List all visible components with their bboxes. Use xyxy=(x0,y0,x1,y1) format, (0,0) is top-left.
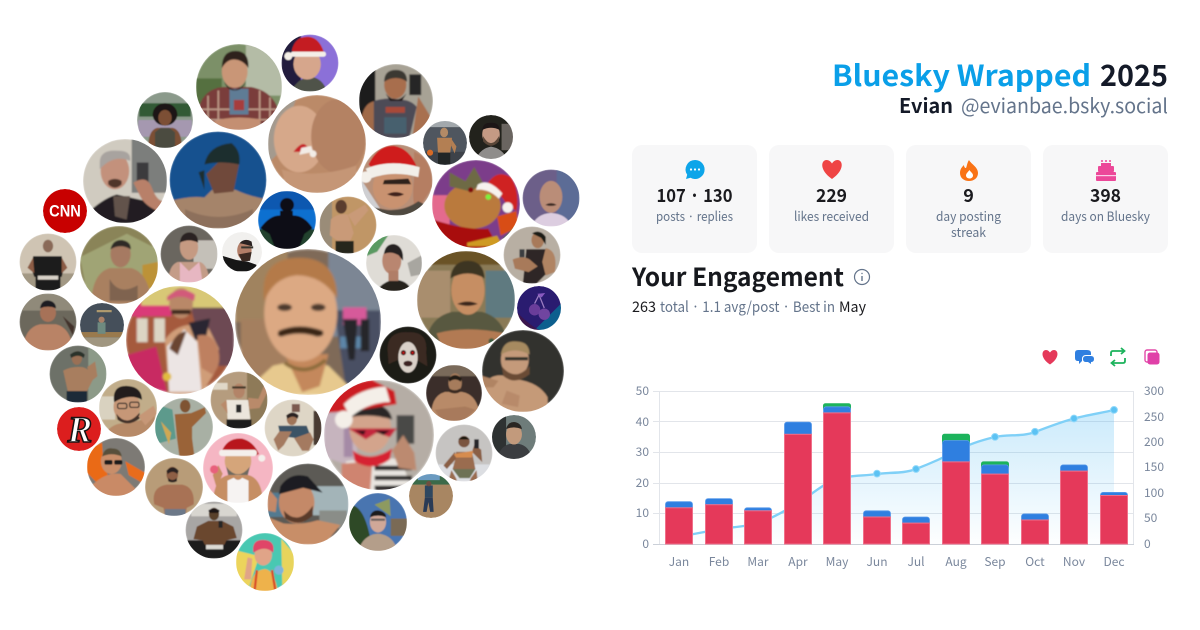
icon: replies bubbles xyxy=(1075,350,1094,364)
avatar: gym mirror man xyxy=(423,121,467,165)
avatar: santa hat man with red glasses xyxy=(324,380,434,490)
avatar: shirtless man olive wall xyxy=(80,226,158,304)
stat card: day posting streak: 9 xyxy=(963,182,974,208)
right axis labels: 300 xyxy=(1144,382,1164,399)
avatar: santa hat man purple background xyxy=(282,34,338,92)
month labels: Aug xyxy=(945,553,967,570)
engagement summary: 263 xyxy=(632,296,656,317)
left axis labels: 40 xyxy=(636,413,649,430)
avatar: man in black tank mirror xyxy=(20,234,76,290)
avatar: plaid shirt man xyxy=(196,44,282,130)
icon: info xyxy=(854,270,870,284)
chart: monthly engagement xyxy=(636,382,1164,570)
avatar: cartoon man with santa hat pink background xyxy=(203,433,273,503)
title: 2025 xyxy=(1100,53,1168,95)
avatar: CNN logo xyxy=(43,189,87,233)
right axis labels: 0 xyxy=(1144,535,1151,552)
avatar: smiling man in dark tee xyxy=(492,415,536,459)
avatar: R logo: R xyxy=(67,409,92,450)
cumulative points xyxy=(874,406,1117,477)
avatar: man in white tank pink scene xyxy=(126,286,234,394)
icon: reposts arrows xyxy=(1111,348,1125,366)
avatar: muscular man brick wall xyxy=(145,458,203,516)
avatar: colorful cartoon man xyxy=(236,533,294,591)
right axis labels: 100 xyxy=(1144,484,1164,501)
avatar: bearded man dark wall xyxy=(482,330,564,412)
stat card: days on Bluesky: days on Bluesky xyxy=(1061,206,1150,225)
month labels: Feb xyxy=(709,553,729,570)
stat card: likes received xyxy=(769,145,894,253)
left axis labels: 20 xyxy=(636,474,649,491)
avatar: bearded man dark background xyxy=(469,115,513,159)
avatar: R logo xyxy=(57,407,101,451)
avatar cluster xyxy=(20,34,580,591)
right axis labels: 150 xyxy=(1144,458,1164,475)
avatar: dark gym selfie man xyxy=(186,502,242,558)
month labels: Mar xyxy=(747,553,769,570)
cumulative area xyxy=(679,410,1114,544)
avatar: shirtless man dark background xyxy=(20,294,76,350)
grid lines xyxy=(653,391,1134,544)
stat card: posts and replies: posts · replies xyxy=(656,206,733,225)
month labels: Jan xyxy=(669,553,689,570)
avatar: blue sky silhouette xyxy=(258,191,316,249)
stat card: posts and replies: 107 · 130 xyxy=(656,182,732,208)
stat card: likes received: 229 xyxy=(816,182,847,208)
engagement summary: total · 1.1 avg/post · Best in xyxy=(660,296,835,317)
avatar: man seated before dark wall xyxy=(80,303,124,347)
blue bars xyxy=(666,407,1128,527)
icon: flame xyxy=(960,160,978,181)
avatar: grey band tee selfie man xyxy=(359,64,433,138)
stat card: posts and replies xyxy=(632,145,757,253)
month labels: Apr xyxy=(788,553,808,570)
avatar: man outdoors in sunshine xyxy=(349,493,407,551)
left axis labels: 0 xyxy=(642,535,649,552)
avatar: man in underwear selfie xyxy=(436,424,492,482)
left axis labels: 10 xyxy=(636,504,649,521)
right axis labels: 200 xyxy=(1144,433,1164,450)
avatar: smiling man in olive tee xyxy=(417,251,515,349)
stat card: day posting streak: day posting xyxy=(936,206,1002,225)
avatar: crouching man white room xyxy=(264,400,322,456)
avatar: man with glasses reclining xyxy=(99,379,157,437)
left axis labels xyxy=(636,382,649,552)
avatar: man in pink tank xyxy=(160,226,218,282)
stat card: day posting streak xyxy=(906,145,1031,253)
month labels: Nov xyxy=(1063,553,1086,570)
right axis labels xyxy=(1144,382,1164,552)
legend icons xyxy=(1043,348,1160,366)
avatar: shirtless man arms crossed xyxy=(426,365,482,421)
title: Bluesky Wrapped xyxy=(832,53,1091,95)
avatar: afro man in tank xyxy=(137,92,193,148)
avatar: flexing man with phone xyxy=(504,226,560,284)
stat card: day posting streak: streak xyxy=(951,222,987,241)
right axis labels: 250 xyxy=(1144,408,1164,425)
avatar: bare chest with santa hat xyxy=(268,95,366,193)
month labels: Dec xyxy=(1103,553,1125,570)
left axis labels: 30 xyxy=(636,443,649,460)
x axis line xyxy=(653,544,1134,546)
month labels: Jun xyxy=(866,553,888,570)
icon: cake xyxy=(1096,160,1116,181)
avatar: large moustache man with street scene xyxy=(235,249,381,395)
red bars xyxy=(666,413,1128,544)
green bars xyxy=(823,403,1009,469)
icon: heart xyxy=(822,160,842,179)
avatar: CNN logo: CNN xyxy=(49,202,81,221)
avatar: shirtless man on tan background xyxy=(320,196,376,254)
avatar: man on sandy ground xyxy=(409,474,453,518)
user name and handle: @evianbae.bsky.social xyxy=(961,90,1168,119)
left axis labels: 50 xyxy=(636,382,649,399)
icon: chat bubble xyxy=(686,160,705,179)
user name and handle: Evian xyxy=(899,90,953,119)
month labels xyxy=(669,553,1125,570)
avatar: santa hat man arm raised xyxy=(360,144,432,216)
avatar: man with sunglasses orange lounge xyxy=(87,438,145,496)
avatar: shirtless man mirror green wall xyxy=(50,346,106,402)
month labels: Oct xyxy=(1025,553,1045,570)
avatar: cartoon king with santa hat xyxy=(432,160,520,248)
avatar: man with glasses on white xyxy=(222,232,262,272)
month labels: May xyxy=(826,553,849,570)
engagement summary: May xyxy=(839,296,866,317)
avatar: man in black cap xyxy=(268,464,348,544)
month labels: Jul xyxy=(907,553,925,570)
avatar: bald man purple background xyxy=(522,170,580,226)
cumulative line xyxy=(679,410,1114,537)
stat card: days on Bluesky xyxy=(1043,145,1168,253)
icon: quotes squares xyxy=(1145,350,1160,364)
avatar: purple cherries xyxy=(517,286,561,330)
stat card: days on Bluesky: 398 xyxy=(1090,182,1121,208)
right axis labels: 50 xyxy=(1144,509,1158,526)
avatar: man side profile black tee xyxy=(366,235,422,291)
month labels: Sep xyxy=(984,553,1006,570)
avatar: horror makeup figure xyxy=(380,326,436,384)
stat card: likes received: likes received xyxy=(794,206,869,225)
avatar: blue sky hairy chest xyxy=(170,132,266,228)
avatar: man in white tank flexing xyxy=(210,372,268,428)
avatar: bandana selfie man xyxy=(83,139,167,223)
heading: Your Engagement: Your Engagement xyxy=(631,258,844,294)
avatar: nude man teal wall xyxy=(155,398,213,456)
icon: likes heart xyxy=(1043,350,1057,364)
